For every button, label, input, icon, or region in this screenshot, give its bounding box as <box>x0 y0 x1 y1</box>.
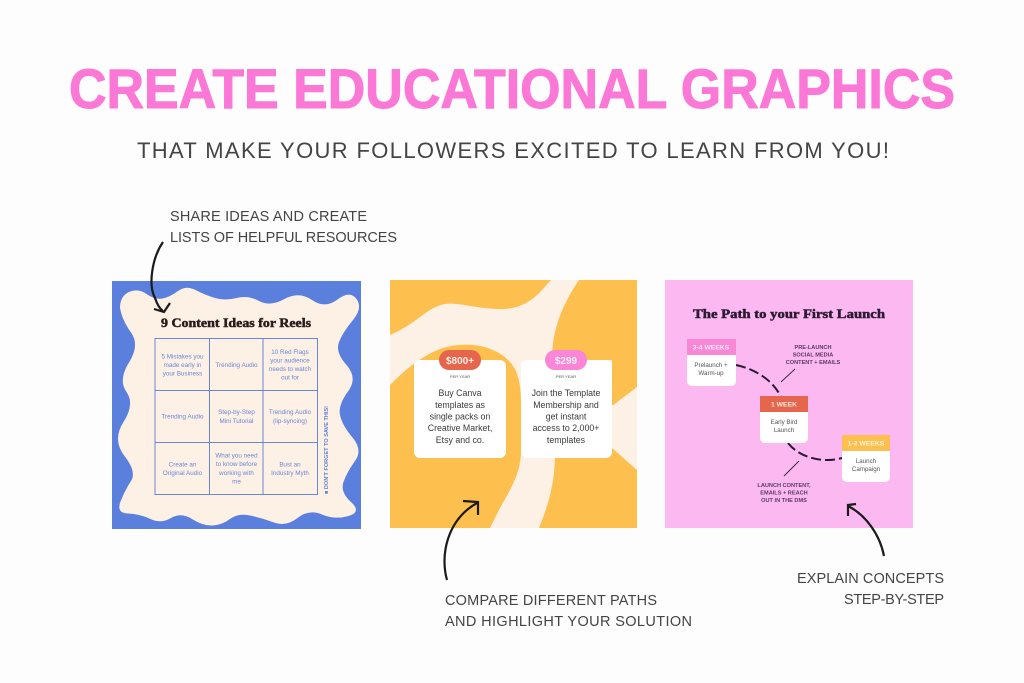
step: early bird: 1 WEEK <box>771 402 797 408</box>
yellow blob: top left <box>390 280 551 335</box>
step: launch campaign: 1-2 WEEKS <box>848 440 885 448</box>
step: prelaunch: 3-4 WEEKS <box>693 344 730 352</box>
grid text: What you need <box>215 452 258 460</box>
grid text: Industry Myth <box>271 470 309 477</box>
grid text: Trending Audio <box>269 409 312 416</box>
card: membership: Join the Template <box>532 388 600 398</box>
card: membership: access to 2,000+ <box>533 423 599 433</box>
callout: explain concepts: EXPLAIN CONCEPTS <box>797 571 944 587</box>
card: membership: templates <box>547 435 586 445</box>
card: template packs: $800+ <box>446 356 474 367</box>
label: launch content: EMAILS + REACH <box>760 490 808 496</box>
grid text: your audience <box>270 358 310 364</box>
panel: compare paths <box>390 280 637 528</box>
3x3 grid <box>155 338 318 494</box>
card: template packs: PER YEAR <box>450 374 470 379</box>
step: early bird: Launch <box>774 427 795 434</box>
card: membership: Membership and <box>533 400 599 410</box>
title: CREATE EDUCATIONAL GRAPHICS <box>69 57 955 120</box>
card: membership <box>521 350 612 458</box>
label: pre-launch: CONTENT + EMAILS <box>786 360 841 366</box>
callout: explain concepts <box>797 571 944 608</box>
grid text: Trending Audio <box>161 414 204 420</box>
grid text: me <box>232 478 241 486</box>
card: membership: $299 <box>555 356 578 367</box>
grid text: (lip-syncing) <box>273 418 307 425</box>
wavy cream shape <box>118 288 359 526</box>
arrow: to first panel <box>152 242 170 312</box>
grid text: Mini Tutorial <box>220 418 253 425</box>
callout: share ideas <box>170 209 397 246</box>
step: prelaunch: Prelaunch + <box>694 362 728 369</box>
step: early bird: Early Bird <box>771 419 798 426</box>
step: launch campaign <box>842 435 890 482</box>
card: template packs: Buy Canva <box>438 388 482 398</box>
arrow: to third panel <box>848 504 884 556</box>
card: membership: get instant <box>546 412 587 422</box>
step: launch campaign: Launch <box>856 458 877 465</box>
callout: share ideas: LISTS OF HELPFUL RESOURCES <box>170 230 397 246</box>
label: launch content: OUT IN THE DMS <box>761 498 807 504</box>
grid text: Create an <box>169 462 197 468</box>
grid text <box>161 349 312 486</box>
callout: compare paths: AND HIGHLIGHT YOUR SOLUTION <box>445 614 692 630</box>
panel: launch path <box>665 280 913 528</box>
grid text: 10 Red Flags <box>271 349 309 356</box>
label: pre-launch: SOCIAL MEDIA <box>793 352 833 358</box>
step: launch campaign: Campaign <box>852 466 881 473</box>
pointer lines <box>781 369 799 476</box>
grid text: Trending Audio <box>215 362 258 369</box>
grid text: needs to watch <box>269 366 312 373</box>
callout: explain concepts: STEP-BY-STEP <box>844 592 944 608</box>
callout: share ideas: SHARE IDEAS AND CREATE <box>170 209 367 225</box>
card: template packs: templates as <box>435 400 486 410</box>
callout: compare paths <box>445 593 692 630</box>
card: template packs <box>414 350 506 458</box>
grid text: made early in <box>164 362 202 369</box>
grid text: 5 Mistakes you <box>162 354 204 360</box>
vertical note: ■ DON'T FORGET TO SAVE THIS! <box>324 406 330 494</box>
callout: compare paths: COMPARE DIFFERENT PATHS <box>445 593 657 609</box>
subtitle: THAT MAKE YOUR FOLLOWERS EXCITED TO LEARN FROM YOU! <box>137 138 889 163</box>
yellow blob: top right <box>552 280 637 406</box>
grid text: out for <box>281 374 299 382</box>
step: prelaunch <box>687 339 736 386</box>
arrow: to second panel <box>445 501 478 580</box>
grid text: Original Audio <box>163 470 203 477</box>
label: pre-launch: PRE-LAUNCH <box>795 345 831 351</box>
card: template packs: single packs on <box>430 412 490 422</box>
label: launch content: LAUNCH CONTENT, <box>757 483 811 489</box>
grid text: Bust an <box>279 462 301 468</box>
grid text: your Business <box>163 370 202 378</box>
card: membership: PER YEAR <box>556 374 576 379</box>
yellow blob: centre left <box>390 345 521 528</box>
dashed connectors <box>736 365 842 460</box>
card: template packs: Etsy and co. <box>436 435 484 445</box>
grid text: Step-by-Step <box>218 409 255 416</box>
panel: content ideas <box>112 281 361 529</box>
panel heading: 9 Content Ideas for Reels <box>161 315 311 330</box>
step: prelaunch: Warm-up <box>698 370 724 377</box>
grid text: to know before <box>216 461 258 468</box>
label: launch content <box>757 483 811 504</box>
step: early bird <box>760 396 808 443</box>
yellow blob: bottom right <box>539 448 637 528</box>
card: template packs: Creative Market, <box>428 423 492 433</box>
label: pre-launch <box>786 345 841 366</box>
grid text: working with <box>218 470 254 477</box>
panel heading: The Path to your First Launch <box>693 306 886 321</box>
